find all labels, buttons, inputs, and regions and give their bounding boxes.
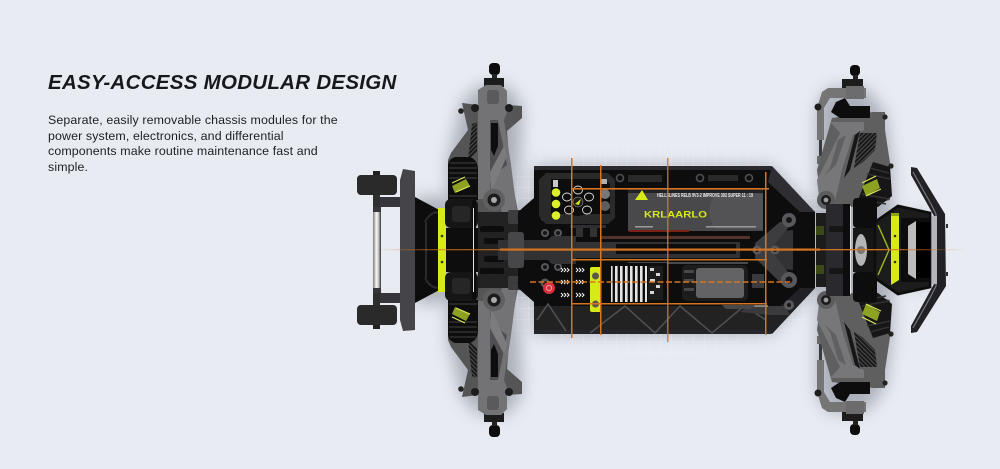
direction chevrons (561, 268, 584, 297)
description text: components make routine maintenance fast and (48, 144, 318, 158)
chassis tray (498, 166, 815, 334)
wheelie wheel: bottom (357, 305, 397, 325)
description text: power system, electronics, and differential (48, 129, 284, 143)
front bumper frame (875, 206, 930, 294)
ESC electronics module (539, 173, 615, 237)
motor (603, 263, 667, 305)
battery logo mark (635, 190, 648, 200)
title: EASY-ACCESS MODULAR DESIGN (48, 71, 397, 94)
wheelie bar (357, 169, 446, 331)
servo module (682, 265, 768, 309)
front bumper (911, 167, 948, 333)
wheelie wheel: top (357, 175, 397, 195)
chassis illustration (357, 63, 962, 437)
power button (543, 282, 555, 294)
blueprint grid (478, 154, 853, 344)
cooling fan (562, 186, 594, 216)
battery (628, 189, 763, 232)
status indicator dots (552, 188, 560, 220)
description text: simple. (48, 160, 88, 174)
front yellow bracket (891, 213, 899, 285)
yellow motor bracket (590, 267, 601, 312)
description text (48, 113, 338, 174)
battery spec text: HELLSLINES RELB 9V3-2 IMPROVE 392 SUPER 11 : 19 (657, 193, 753, 199)
rear suspension assembly (445, 63, 530, 437)
center spine (498, 236, 740, 264)
rear yellow bracket (438, 208, 446, 292)
description text: Separate, easily removable chassis modules for the (48, 113, 338, 127)
soft drop shadow (415, 85, 930, 415)
battery brand text: KRLAARLO (644, 210, 707, 220)
orange guide lines (375, 158, 965, 342)
front suspension assembly (814, 65, 894, 435)
